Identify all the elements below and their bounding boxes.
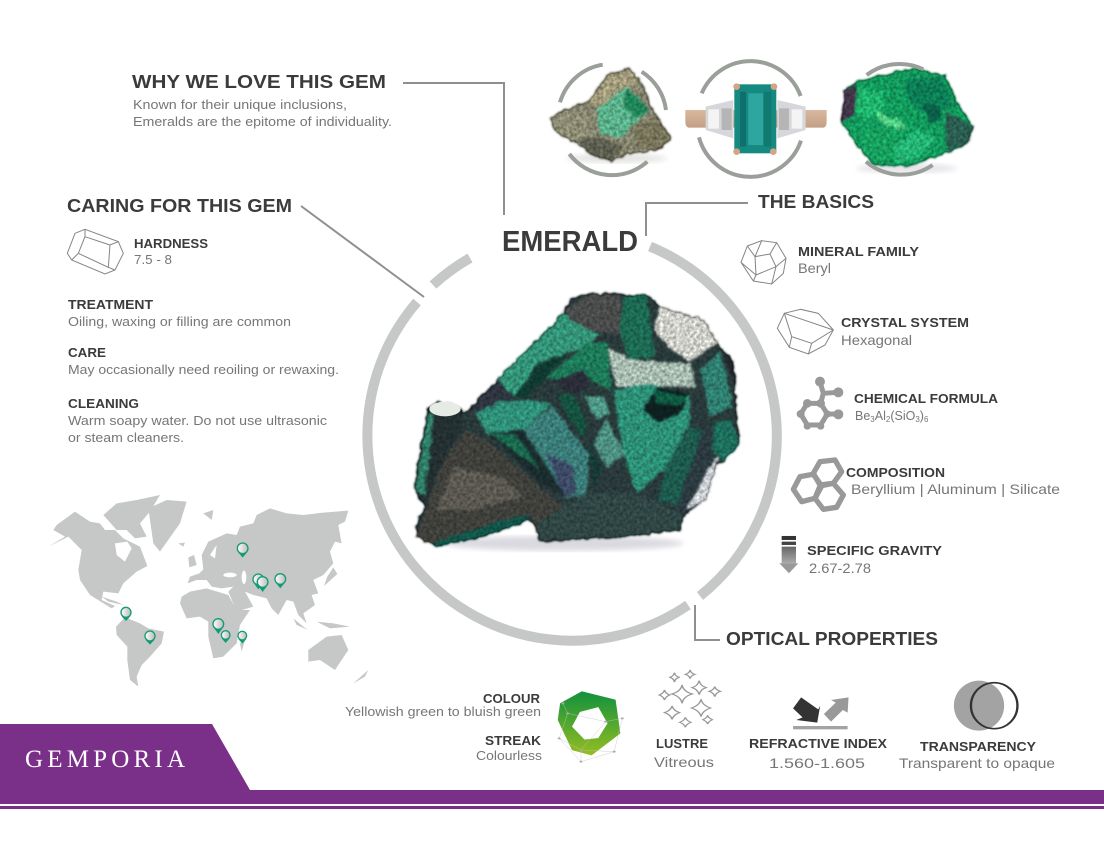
heading: why we love this gem: WHY WE LOVE THIS GEM bbox=[132, 72, 386, 92]
icon: crystal system bbox=[777, 309, 833, 354]
text: transparency bbox=[899, 739, 1055, 771]
central ring bbox=[367, 246, 777, 641]
text: treatment bbox=[68, 297, 291, 329]
text: chemical formula: Al bbox=[875, 409, 886, 423]
title: emerald: EMERALD bbox=[502, 226, 638, 258]
photo: emerald ring bbox=[685, 83, 827, 155]
text: chemical formula: Be bbox=[855, 409, 870, 423]
text: chemical formula: CHEMICAL FORMULA bbox=[854, 391, 999, 406]
connector line: optical bbox=[695, 605, 720, 640]
icon: specific gravity arrow bbox=[779, 536, 798, 573]
text: why we love description bbox=[133, 97, 392, 129]
section: the basics bbox=[646, 192, 1060, 576]
heading: caring for this gem: CARING FOR THIS GEM bbox=[67, 196, 292, 216]
section: why we love this gem bbox=[132, 72, 504, 215]
text: composition: Beryllium | Aluminum | Silicate bbox=[851, 481, 1060, 497]
text: chemical formula: ) bbox=[920, 409, 924, 423]
icon: lustre sparkles bbox=[659, 670, 720, 727]
text: care bbox=[68, 345, 339, 377]
text: cleaning bbox=[68, 396, 328, 445]
location pins bbox=[121, 543, 286, 645]
text: composition bbox=[846, 465, 1060, 497]
text: hardness: HARDNESS bbox=[134, 236, 208, 251]
photo: rough emerald in host rock bbox=[551, 68, 672, 163]
text: mineral family bbox=[798, 244, 919, 276]
heading: optical properties: OPTICAL PROPERTIES bbox=[726, 629, 938, 649]
section: optical properties bbox=[345, 605, 1055, 771]
text: cleaning: Warm soapy water. Do not use ultrasonic bbox=[68, 413, 328, 428]
text: why we love description: Emeralds are the epitome of individuality. bbox=[133, 114, 392, 129]
icon: refractive index bbox=[793, 697, 849, 729]
text: streak: Colourless bbox=[476, 748, 543, 763]
text: hardness: 7.5 - 8 bbox=[134, 252, 172, 267]
section: caring for this gem bbox=[67, 196, 424, 445]
photo: green crystal cluster bbox=[842, 68, 973, 173]
icon: colour ring bbox=[558, 692, 624, 763]
text: chemical formula: 6 bbox=[924, 415, 929, 424]
text: care: May occasionally need reoiling or rewaxing. bbox=[68, 362, 339, 377]
gem photos bbox=[551, 61, 973, 177]
text: refractive index: REFRACTIVE INDEX bbox=[749, 736, 887, 751]
map water: inland seas bbox=[115, 542, 257, 600]
icon: composition hexagons bbox=[793, 460, 843, 509]
text: chemical formula bbox=[854, 391, 999, 424]
text: crystal system: CRYSTAL SYSTEM bbox=[841, 315, 969, 330]
text: transparency: Transparent to opaque bbox=[899, 755, 1055, 771]
text: lustre: Vitreous bbox=[654, 754, 714, 770]
main photo: emerald specimen bbox=[415, 293, 740, 551]
icon: hardness crystal bbox=[67, 229, 123, 274]
logo: gemporia: GEMPORIA bbox=[25, 746, 185, 773]
text: refractive index: 1.560-1.605 bbox=[769, 755, 865, 771]
text: refractive index bbox=[749, 736, 887, 771]
decorative arcs around photos bbox=[560, 61, 933, 177]
text: colour bbox=[345, 691, 541, 719]
text: lustre bbox=[654, 736, 714, 770]
text: specific gravity: SPECIFIC GRAVITY bbox=[807, 543, 942, 558]
text: crystal system bbox=[841, 315, 969, 348]
text: chemical formula: 3 bbox=[915, 415, 920, 424]
text: composition: COMPOSITION bbox=[846, 465, 945, 480]
text: transparency: TRANSPARENCY bbox=[920, 739, 1036, 754]
text: specific gravity: 2.67-2.78 bbox=[809, 560, 871, 576]
text: streak bbox=[476, 733, 543, 763]
text: colour: COLOUR bbox=[483, 691, 541, 706]
text: chemical formula: 2 bbox=[886, 415, 891, 424]
text: treatment: Oiling, waxing or filling are common bbox=[68, 314, 291, 329]
text: why we love description: Known for their unique inclusions, bbox=[133, 97, 347, 112]
connector line: caring bbox=[301, 206, 424, 297]
text: specific gravity bbox=[807, 543, 942, 576]
text: lustre: LUSTRE bbox=[656, 736, 708, 751]
text: chemical formula: 3 bbox=[870, 415, 875, 424]
footer rule bbox=[0, 806, 1104, 809]
text: cleaning: or steam cleaners. bbox=[68, 430, 184, 445]
text: hardness bbox=[134, 236, 208, 267]
text: colour: Yellowish green to bluish green bbox=[345, 704, 541, 719]
footer banner bbox=[0, 724, 1104, 809]
world map bbox=[48, 495, 368, 687]
white crystal cap bbox=[429, 402, 461, 416]
icon: mineral family dodecahedron bbox=[741, 241, 786, 284]
icon: chemical formula molecule bbox=[797, 377, 843, 430]
purple banner shape bbox=[0, 724, 1104, 804]
text: cleaning: CLEANING bbox=[68, 396, 139, 411]
text: mineral family: Beryl bbox=[798, 261, 831, 276]
map landmasses bbox=[48, 495, 368, 687]
heading: the basics: THE BASICS bbox=[758, 192, 874, 212]
text: mineral family: MINERAL FAMILY bbox=[798, 244, 919, 259]
text: care: CARE bbox=[68, 345, 106, 360]
icon: transparency circles bbox=[954, 681, 1017, 731]
text: treatment: TREATMENT bbox=[68, 297, 153, 312]
text: crystal system: Hexagonal bbox=[841, 332, 912, 348]
text: chemical formula: (SiO bbox=[890, 409, 916, 423]
text: streak: STREAK bbox=[485, 733, 542, 748]
connector line: why we love bbox=[403, 83, 504, 215]
connector line: basics bbox=[646, 203, 748, 236]
